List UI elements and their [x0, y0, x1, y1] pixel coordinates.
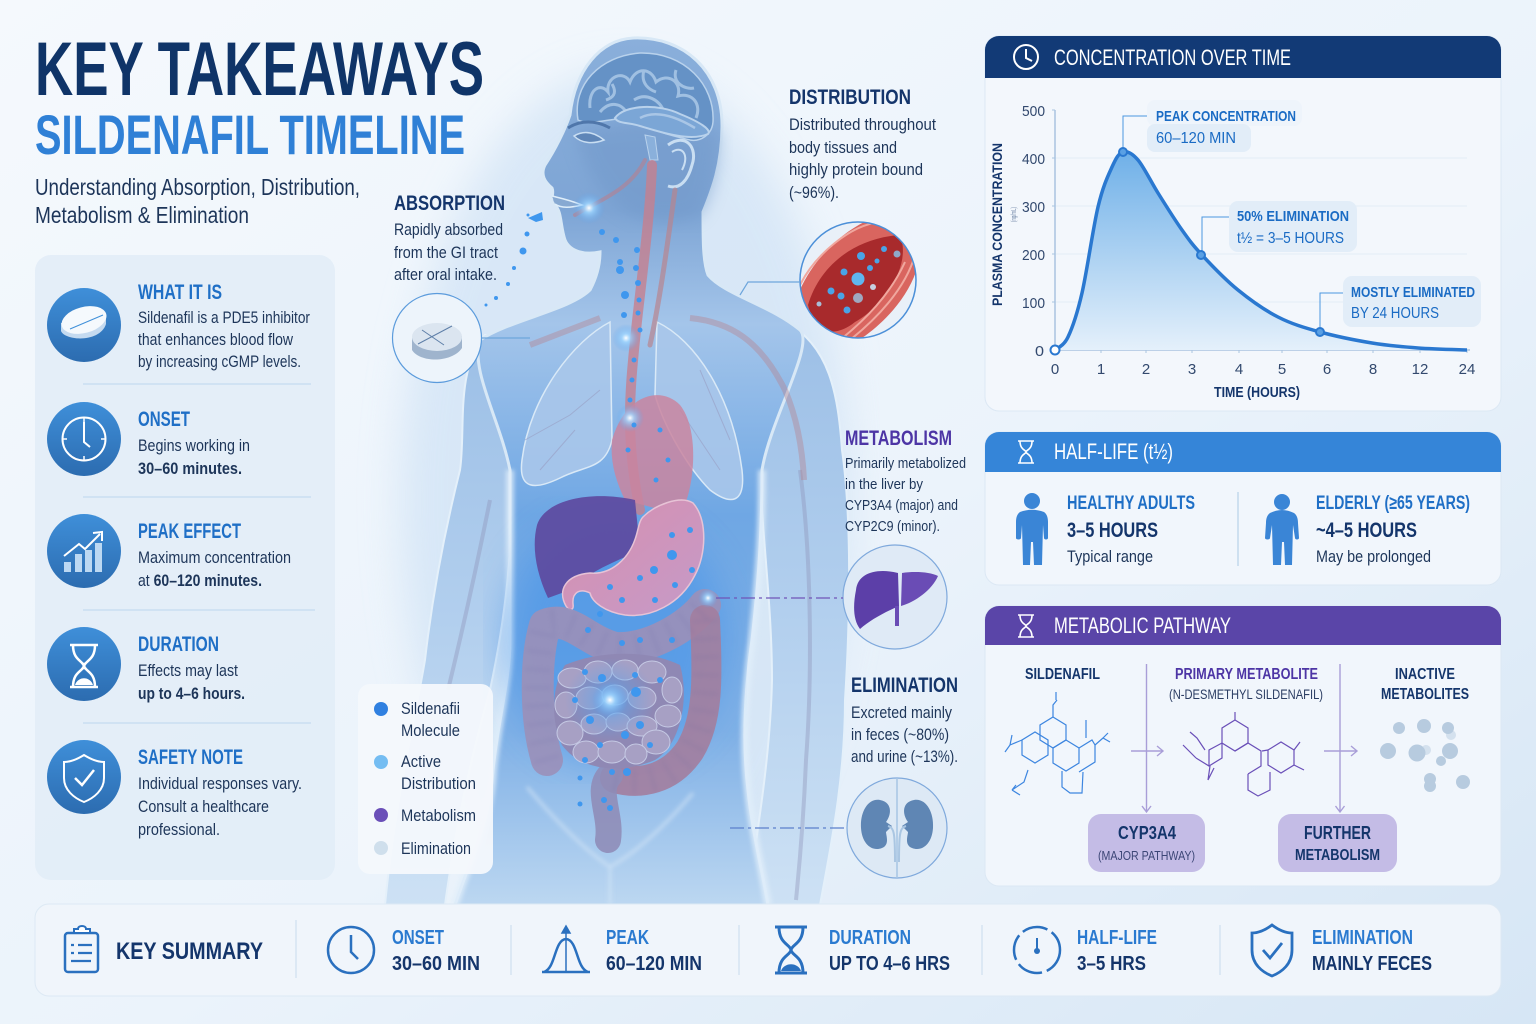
colon	[538, 605, 706, 840]
summary: duration: UP TO 4–6 HRS	[829, 953, 950, 975]
panel header: METABOLIC PATHWAY	[1054, 613, 1231, 638]
callout: mostly eliminated	[1320, 276, 1481, 332]
groin creases	[527, 787, 693, 905]
glow points	[565, 192, 718, 742]
callout: 50% elimination: 50% ELIMINATION	[1237, 208, 1349, 225]
y axis labels: 500	[1022, 103, 1045, 120]
callout: elimination: in feces (~80%)	[851, 725, 949, 744]
item: safety note: Individual responses vary.	[138, 774, 302, 793]
summary: duration	[775, 927, 950, 975]
column: primary metabolite	[1169, 666, 1323, 796]
item: peak effect	[47, 514, 291, 590]
column: inactive metabolites: METABOLITES	[1381, 686, 1469, 703]
arm vessels	[448, 470, 810, 900]
box: further metabolism: METABOLISM	[1295, 847, 1380, 864]
body silhouette	[455, 38, 803, 905]
callout: distribution: highly protein bound	[789, 160, 923, 179]
callout: elimination: ELIMINATION	[851, 674, 958, 697]
y axis labels: 100	[1022, 295, 1045, 312]
item: onset: 30–60 minutes.	[138, 459, 242, 478]
legend	[358, 684, 493, 874]
column: inactive metabolites	[1380, 666, 1470, 792]
callout: metabolism: in the liver by	[845, 476, 923, 493]
column: sildenafil	[1005, 666, 1110, 795]
x axis labels: 6	[1323, 361, 1331, 378]
item: what it is: by increasing cGMP levels.	[138, 352, 301, 371]
item: duration: Effects may last	[138, 661, 238, 680]
title block	[35, 27, 484, 228]
x axis labels: 1	[1097, 361, 1105, 378]
lungs	[521, 322, 743, 500]
area under curve	[1055, 152, 1467, 350]
item: peak effect: Maximum concentration	[138, 548, 291, 567]
panel: key facts	[35, 255, 335, 880]
callout: elimination: Excreted mainly	[851, 703, 952, 722]
callout: absorption: ABSORPTION	[394, 192, 505, 215]
abdominal glow	[505, 520, 725, 760]
callout: metabolism	[716, 427, 966, 649]
y axis labels: 200	[1022, 247, 1045, 264]
line chart	[989, 100, 1481, 401]
panel: metabolic pathway	[985, 606, 1501, 886]
box: further metabolism: FURTHER	[1304, 823, 1371, 843]
concentration curve	[1055, 152, 1467, 350]
callout: elimination	[730, 674, 958, 878]
callout: 50% elimination: t½ = 3–5 HOURS	[1237, 230, 1344, 247]
item: onset: ONSET	[138, 408, 190, 431]
box: CYP3A4: CYP3A4	[1118, 823, 1176, 843]
elderly: ELDERLY (≥65 YEARS)	[1316, 493, 1470, 514]
callout: absorption	[392, 192, 543, 382]
x axis labels: 8	[1369, 361, 1377, 378]
legend: sildenafil molecule: Sildenafii	[401, 699, 460, 718]
item: what it is: WHAT IT IS	[138, 281, 222, 304]
summary: elimination	[1252, 925, 1432, 976]
shoulder vessels	[530, 318, 804, 480]
y axis labels	[1022, 103, 1045, 360]
summary: onset: ONSET	[392, 927, 444, 949]
column: primary metabolite: PRIMARY METABOLITE	[1175, 666, 1318, 683]
callout: peak concentration: 60–120 MIN	[1156, 130, 1236, 147]
axis titles: TIME (HOURS)	[1214, 384, 1300, 401]
face features	[552, 122, 694, 207]
item: safety note: Consult a healthcare	[138, 797, 269, 816]
item: onset	[47, 402, 250, 478]
icon: liver	[716, 545, 947, 649]
x axis labels: 12	[1412, 361, 1428, 378]
legend: active distribution: Active	[401, 752, 441, 771]
y axis labels: 300	[1022, 199, 1045, 216]
description line 1: Understanding Absorption, Distribution,	[35, 174, 360, 200]
item: what it is: Sildenafil is a PDE5 inhibitor	[138, 308, 310, 327]
y axis labels: 400	[1022, 151, 1045, 168]
summary: onset: 30–60 MIN	[392, 953, 480, 975]
item: peak effect: PEAK EFFECT	[138, 520, 241, 543]
x axis labels: 4	[1235, 361, 1243, 378]
callout: peak concentration: PEAK CONCENTRATION	[1156, 108, 1296, 125]
elderly: ~4–5 HOURS	[1316, 519, 1417, 542]
healthy adults: Typical range	[1067, 547, 1153, 566]
summary: peak	[542, 926, 702, 975]
line chart: (ng/mL)	[1011, 207, 1018, 222]
callout: distribution: DISTRIBUTION	[789, 86, 911, 109]
x axis labels: 24	[1459, 361, 1475, 378]
callout: 50% elimination	[1202, 201, 1357, 255]
summary: elimination: ELIMINATION	[1312, 927, 1413, 949]
callout: distribution: (~96%).	[789, 183, 839, 202]
legend: metabolism	[374, 806, 476, 825]
healthy adults: 3–5 HOURS	[1067, 519, 1158, 542]
subtitle: SILDENAFIL TIMELINE	[35, 103, 465, 166]
item: duration: up to 4–6 hours.	[138, 684, 245, 703]
panel: concentration over time	[985, 36, 1501, 411]
flow lines	[1131, 664, 1357, 812]
x axis labels	[1051, 361, 1475, 378]
callout: metabolism: CYP3A4 (major) and	[845, 497, 958, 514]
summary heading: KEY SUMMARY	[116, 938, 263, 965]
summary: peak: PEAK	[606, 927, 649, 949]
head shading	[586, 126, 726, 220]
summary: onset	[328, 927, 480, 975]
column: sildenafil: SILDENAFIL	[1025, 666, 1100, 683]
summary: half-life: 3–5 HRS	[1077, 953, 1146, 975]
item: what it is	[47, 281, 310, 371]
x axis labels: 0	[1051, 361, 1059, 378]
x axis labels: 3	[1188, 361, 1196, 378]
box: CYP3A4	[1088, 814, 1205, 872]
column: inactive metabolites: INACTIVE	[1395, 666, 1455, 683]
line chart: PLASMA CONCENTRATION	[989, 143, 1005, 306]
legend: elimination	[374, 839, 471, 858]
drug particles	[572, 229, 695, 811]
torso edge highlights	[455, 470, 768, 905]
brain	[577, 53, 713, 160]
healthy adults: HEALTHY ADULTS	[1067, 493, 1195, 514]
callout: mostly eliminated: MOSTLY ELIMINATED	[1351, 284, 1475, 301]
callout: metabolism: CYP2C9 (minor).	[845, 518, 940, 535]
callout: elimination: and urine (~13%).	[851, 747, 958, 766]
callout: metabolism: Primarily metabolized	[845, 455, 966, 472]
panel header: CONCENTRATION OVER TIME	[1054, 45, 1291, 70]
legend: active distribution: Distribution	[401, 774, 476, 793]
icon: blood vessel	[740, 218, 920, 345]
callout: metabolism: METABOLISM	[845, 427, 952, 450]
item: what it is: that enhances blood flow	[138, 330, 294, 349]
panel: half-life	[985, 432, 1501, 585]
heart	[612, 395, 693, 515]
item: duration: DURATION	[138, 633, 219, 656]
callout: absorption: after oral intake.	[394, 265, 497, 284]
panel header	[985, 432, 1501, 472]
healthy adults	[1016, 493, 1195, 566]
callout: distribution: body tissues and	[789, 138, 897, 157]
elderly: May be prolonged	[1316, 547, 1431, 566]
summary: half-life	[1014, 927, 1157, 975]
x axis labels: 5	[1278, 361, 1286, 378]
box: CYP3A4: (MAJOR PATHWAY)	[1098, 848, 1195, 863]
callout: absorption: Rapidly absorbed	[394, 220, 503, 239]
callout: distribution: Distributed throughout	[789, 115, 936, 134]
left arm	[385, 335, 511, 905]
summary: elimination: MAINLY FECES	[1312, 953, 1432, 975]
item: safety note	[47, 740, 302, 839]
callout: mostly eliminated: BY 24 HOURS	[1351, 305, 1439, 322]
x axis labels: 2	[1142, 361, 1150, 378]
callout: peak concentration	[1123, 100, 1302, 152]
summary heading	[65, 926, 263, 972]
summary: duration: DURATION	[829, 927, 911, 949]
callout: distribution	[740, 86, 936, 345]
summary: half-life: HALF-LIFE	[1077, 927, 1157, 949]
right arm	[758, 334, 848, 904]
item: onset: Begins working in	[138, 436, 250, 455]
legend: sildenafil molecule	[374, 699, 460, 740]
legend: sildenafil molecule: Molecule	[401, 721, 460, 740]
item: safety note: SAFETY NOTE	[138, 746, 243, 769]
small intestine	[554, 654, 684, 768]
panel header	[985, 606, 1501, 645]
curve markers	[1050, 148, 1324, 354]
icon: tablet	[392, 294, 530, 382]
human body illustration	[385, 38, 850, 930]
liver organ	[535, 496, 640, 598]
molecule: metabolite	[1183, 712, 1304, 796]
summary: peak: 60–120 MIN	[606, 953, 702, 975]
particles from tablet to mouth	[484, 212, 543, 306]
panel header	[985, 36, 1501, 78]
legend: elimination: Elimination	[401, 839, 471, 858]
molecule: sildenafil	[1005, 692, 1110, 795]
callout: absorption: from the GI tract	[394, 243, 498, 262]
item: safety note: professional.	[138, 820, 220, 839]
icon: kidneys	[730, 778, 947, 878]
key summary bar	[35, 904, 1501, 996]
legend: active distribution	[374, 752, 476, 793]
y axis labels: 0	[1035, 343, 1044, 360]
item: peak effect: at 60–120 minutes.	[138, 571, 262, 590]
main title: KEY TAKEAWAYS	[35, 27, 484, 112]
box: further metabolism	[1278, 814, 1397, 872]
item: duration	[47, 627, 245, 703]
panel header: HALF-LIFE (t½)	[1054, 439, 1173, 464]
inactive particles	[1380, 719, 1470, 792]
legend: metabolism: Metabolism	[401, 806, 476, 825]
column: primary metabolite: (N-DESMETHYL SILDENAFIL)	[1169, 686, 1323, 702]
elderly	[1265, 493, 1470, 566]
stomach	[563, 500, 704, 615]
description line 2: Metabolism & Elimination	[35, 202, 249, 228]
esophagus vessels	[575, 160, 675, 510]
